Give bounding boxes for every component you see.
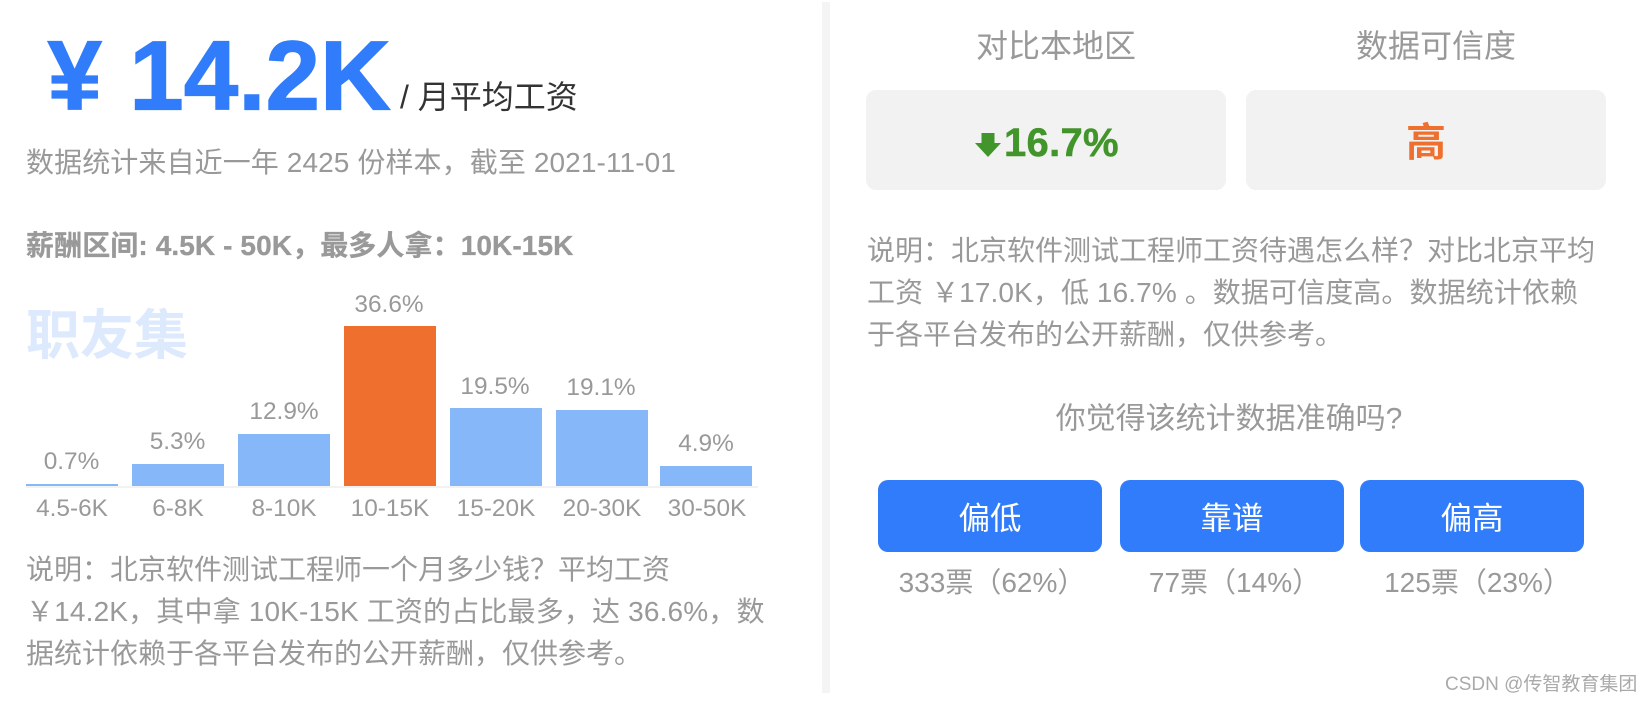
per month label: / 月平均工资	[400, 79, 578, 115]
bar: 4.5-6K: 0.7%	[44, 448, 99, 475]
bar: 20-30K: 20-30K	[563, 495, 641, 522]
explanation text: 说明：北京软件测试工程师一个月多少钱？平均工资	[26, 554, 670, 585]
bar: 4.5-6K: 4.5-6K	[36, 495, 108, 522]
credibility value: 高	[1406, 121, 1446, 165]
big salary figure: ¥ 14.2K	[48, 20, 391, 130]
votes: too low: 333票（62%）	[899, 567, 1085, 598]
bar: 10-15K highlighted: 36.6%	[354, 291, 424, 318]
bar: 30-50K: 30-50K	[668, 495, 746, 522]
explanation text: 工资 ￥17.0K，低 16.7% 。数据可信度高。数据统计依赖	[867, 277, 1578, 308]
bar: 20-30K: 19.1%	[566, 374, 636, 401]
bar: 6-8K: 5.3%	[150, 428, 205, 455]
heading: data credibility: 数据可信度	[1356, 28, 1516, 64]
icon: down arrow	[975, 133, 1001, 157]
bar: 6-8K: 6-8K	[152, 495, 204, 522]
watermark: 职友集	[26, 306, 188, 366]
bar: 15-20K	[450, 373, 542, 522]
bar: 6-8K	[132, 428, 224, 522]
survey question: 你觉得该统计数据准确吗?	[1056, 402, 1402, 436]
bar: 20-30K	[556, 374, 648, 522]
panel: right comparison	[866, 28, 1606, 598]
button: too low	[878, 480, 1102, 552]
explanation text: 据统计依赖于各平台发布的公开薪酬，仅供参考。	[26, 638, 642, 669]
bar: 8-10K: 12.9%	[249, 398, 319, 425]
bar: 15-20K: 19.5%	[460, 373, 530, 400]
bar: 15-20K: 15-20K	[457, 495, 535, 522]
explanation text: 说明：北京软件测试工程师工资待遇怎么样？对比北京平均	[867, 235, 1595, 266]
bar chart	[26, 291, 758, 522]
watermark: CSDN: CSDN @传智教育集团	[1445, 673, 1637, 695]
bar: 4.5-6K	[26, 448, 118, 522]
card: regional comparison	[866, 90, 1226, 190]
bar: 10-15K highlighted: 10-15K	[351, 495, 429, 522]
panel: left salary summary	[26, 20, 765, 669]
bar: 10-15K highlighted	[344, 291, 436, 522]
salary range: 薪酬区间: 4.5K - 50K，最多人拿：10K-15K	[26, 229, 573, 261]
votes: too high: 125票（23%）	[1384, 567, 1571, 598]
button: too high: 偏高	[1440, 500, 1504, 536]
bar: 30-50K	[660, 430, 752, 522]
button: reliable: 靠谱	[1200, 500, 1264, 536]
bar: 8-10K	[238, 398, 330, 522]
votes: reliable: 77票（14%）	[1149, 567, 1320, 598]
button: too high	[1360, 480, 1584, 552]
button: too low: 偏低	[958, 500, 1022, 536]
sample note: 数据统计来自近一年 2425 份样本，截至 2021-11-01	[26, 147, 676, 178]
explanation text: ￥14.2K，其中拿 10K-15K 工资的占比最多，达 36.6%，数	[26, 596, 765, 627]
card: credibility	[1246, 90, 1606, 190]
bar: 30-50K: 4.9%	[678, 430, 734, 457]
heading: regional comparison: 对比本地区	[976, 28, 1136, 64]
percentage: 16.7%	[1004, 121, 1119, 165]
bar: 8-10K: 8-10K	[251, 495, 317, 522]
explanation text: 于各平台发布的公开薪酬，仅供参考。	[867, 319, 1343, 350]
button: reliable	[1120, 480, 1344, 552]
explanation text	[867, 235, 1595, 350]
explanation text	[26, 554, 765, 669]
